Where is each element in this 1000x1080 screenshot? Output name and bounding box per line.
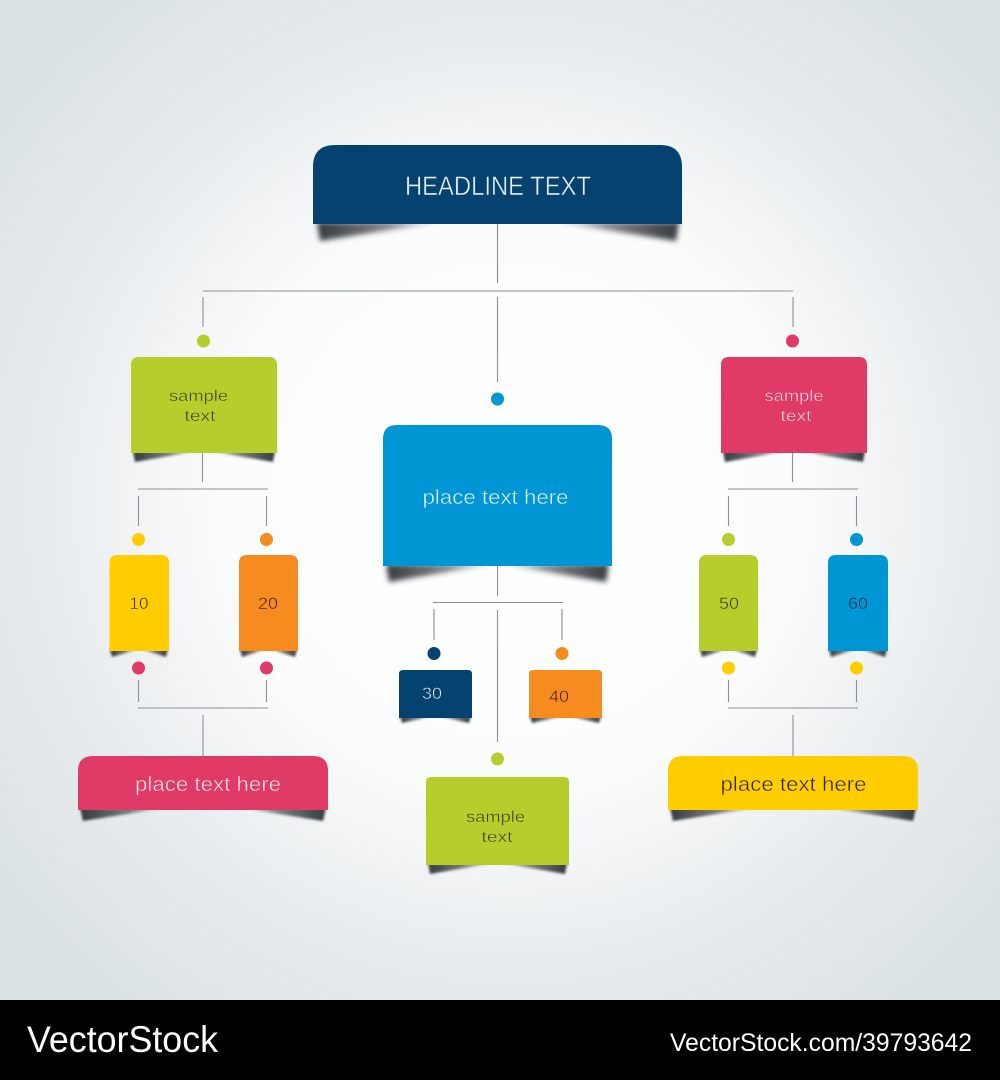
panel: bottom center green box — [426, 777, 569, 874]
panel: bottom center green box: text — [482, 829, 513, 846]
panel: left green box — [131, 357, 277, 462]
dot: 20 bottom — [260, 662, 273, 674]
dot: left branch — [197, 334, 210, 348]
box: 40: 40 — [549, 687, 569, 706]
panel: bottom center green box: sample — [466, 809, 525, 826]
dot: 60 top — [850, 533, 863, 546]
dot: center branch — [491, 392, 504, 406]
panel: bottom right yellow box: place text here — [720, 774, 866, 796]
panel: center blue box — [383, 425, 612, 582]
box: 60 — [828, 555, 888, 657]
panel: left green box: text — [184, 408, 216, 425]
headline text: HEADLINE TEXT — [405, 171, 591, 201]
panel: center blue box: place text here — [422, 487, 568, 509]
dot: 40 top — [556, 647, 568, 660]
box: 30 — [399, 670, 472, 723]
headline box — [313, 145, 682, 241]
box: 20 — [239, 555, 298, 657]
box: 20: 20 — [258, 594, 278, 613]
dot: 20 top — [260, 533, 273, 546]
dot: 30 top — [428, 647, 440, 660]
footer url: VectorStock.com/39793642 — [670, 1029, 972, 1057]
panel: bottom right yellow box — [668, 756, 918, 821]
dot: 50 top — [722, 533, 735, 546]
box: 50: 50 — [719, 594, 739, 613]
connector lines — [138, 224, 858, 756]
dot: 50 bottom — [722, 662, 735, 674]
dot: 10 top — [132, 533, 145, 546]
dot: bottom center — [491, 752, 504, 766]
dot: 60 bottom — [850, 662, 863, 674]
panel: right pink box: sample — [764, 388, 824, 405]
box: 30: 30 — [422, 684, 442, 703]
dot: 10 bottom — [132, 662, 145, 674]
panel: right pink box: text — [780, 408, 812, 425]
panel: right pink box — [721, 357, 867, 462]
box: 60: 60 — [848, 594, 868, 613]
box: 10 — [110, 555, 169, 657]
footer logo: VectorStock — [27, 1019, 218, 1060]
dot: right branch — [786, 334, 799, 348]
box: 10: 10 — [130, 594, 148, 613]
footer bar — [0, 1000, 1000, 1080]
box: 40 — [529, 670, 602, 723]
box: 50 — [699, 555, 758, 657]
panel: bottom left pink box — [78, 756, 328, 821]
panel: left green box: sample — [169, 388, 228, 405]
panel: bottom left pink box: place text here — [135, 774, 281, 796]
